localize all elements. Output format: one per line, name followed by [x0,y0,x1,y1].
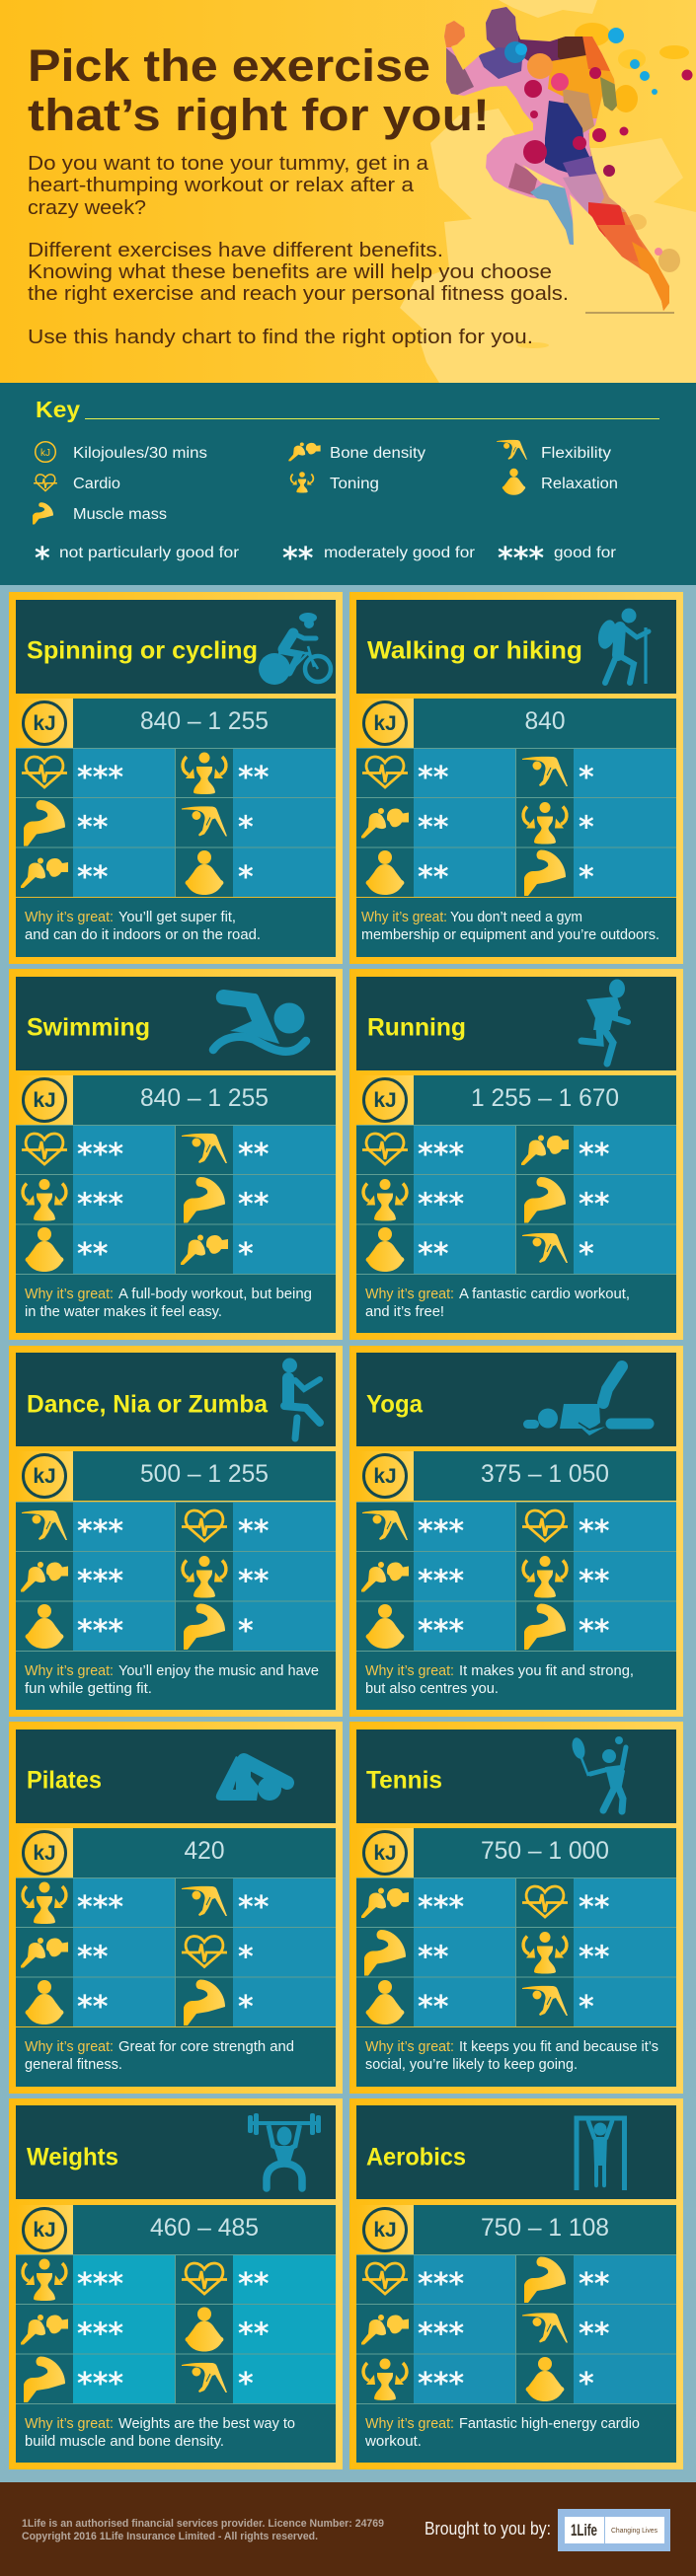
rating: cardio: ** [238,2267,270,2302]
kilojoule range: kJ [33,1465,56,1488]
rating: toning [183,752,270,795]
rating: bone density [361,2315,464,2352]
rating: flexibility [522,1986,594,2024]
icon: runner [581,979,628,1064]
rating: toning [23,1179,123,1222]
kilojoule range: kJ [373,1465,397,1488]
why it's great [16,897,336,957]
rating: bone density: ** [418,811,449,846]
panel: Spinning or cycling [9,592,343,964]
rating: relaxation: *** [418,1614,464,1649]
panel: Yoga [349,1346,683,1717]
icon: yoga pose [523,1366,649,1435]
kilojoule range: 840 – 1 255 [140,1084,269,1112]
panel: Pilates [9,1722,343,2094]
rating: cardio: *** [418,1138,464,1172]
heading: Weights [27,2143,118,2171]
logo: 1Life [558,2509,670,2551]
heading: Running [367,1014,466,1042]
why it's great: Great for core strength and [118,2039,294,2055]
rating: toning [363,1179,464,1222]
kilojoule range [16,1828,336,1877]
logo: 1Life: Changing Lives [611,2526,657,2535]
kilojoule range: 840 – 1 255 [140,707,269,735]
kilojoule range [356,2205,676,2254]
rating: bone density: *** [418,1890,464,1925]
rating: muscle mass: ** [579,1188,610,1222]
heading: Yoga [366,1391,424,1419]
rating: flexibility [182,2363,254,2401]
kilojoule range: kJ [33,2219,56,2242]
legend: two stars: ** [282,542,314,576]
why it's great: membership or equipment and you’re outdoors. [361,927,659,943]
key item: bone density: Bone density [330,445,425,462]
rating: toning [523,1932,610,1975]
icon: dancer [282,1358,320,1438]
rating: bone density [21,1938,109,1975]
rating: relaxation: ** [418,1237,449,1272]
rating: relaxation [366,1604,464,1649]
rating: flexibility: * [579,761,594,795]
title: that’s right for you! [28,90,490,140]
rating: muscle mass: ** [579,1614,610,1649]
rating: muscle mass [184,1177,270,1223]
key item: cardio: Cardio [73,476,120,492]
panel: Tennis [349,1722,683,2094]
rating: toning [523,1556,610,1599]
rating: toning: *** [418,2367,464,2401]
why it's great: build muscle and bone density. [25,2434,224,2450]
rating: relaxation: ** [238,2318,270,2352]
why it's great: fun while getting fit. [25,1681,152,1697]
why it's great: It keeps you fit and because it’s [459,2039,658,2055]
why it's great: general fitness. [25,2057,122,2073]
rating: relaxation [26,1980,109,2024]
key item: flexibility: Flexibility [541,445,611,462]
rating: muscle mass: * [238,1990,254,2024]
brought to you by: Brought to you by: [425,2519,551,2539]
rating: toning [23,2259,123,2302]
icon: cyclist [259,613,331,685]
kilojoule range [16,1451,336,1501]
kilojoule range [16,699,336,748]
kilojoule range: 375 – 1 050 [481,1460,609,1488]
why it's great [16,2026,336,2087]
icon: weightlifter [248,2113,321,2188]
rating: relaxation: ** [418,1990,449,2024]
intro text: the right exercise and reach your personal fitness goals. [28,283,569,305]
kilojoule range: kJ [373,712,397,735]
heading: Walking or hiking [367,637,582,665]
why it's great: Why it’s great: [365,1663,454,1679]
rating: bone density [21,858,109,895]
why it's great: in the water makes it feel easy. [25,1304,222,1320]
why it's great [16,2403,336,2463]
benefit ratings [356,748,676,897]
key item: flexibility [497,440,611,462]
rating: bone density [361,808,449,846]
rating: muscle mass [184,1604,254,1650]
rating: toning: *** [77,2267,123,2302]
rating: flexibility: * [238,811,254,846]
rating: relaxation: ** [77,1990,109,2024]
kilojoule range: kJ [373,1089,397,1112]
rating: cardio [22,1134,123,1172]
rating: toning: *** [77,1890,123,1925]
key item: relaxation: Relaxation [541,476,618,492]
key item: relaxation [503,469,618,495]
rating: bone density: *** [418,2318,464,2352]
rating: cardio [22,757,123,795]
why it's great: social, you’re likely to keep going. [365,2057,578,2073]
why it's great [16,1274,336,1333]
rating: muscle mass [364,1930,449,1975]
why it's great: Fantastic high-energy cardio [459,2416,640,2432]
rating: muscle mass: ** [238,1188,270,1222]
why it's great: A full-body workout, but being [118,1287,312,1302]
illustration: colourful runner [434,0,693,326]
heading: Tennis [366,1766,442,1794]
rating: toning: *** [77,1188,123,1222]
why it's great: Why it’s great: [365,2039,454,2055]
legend: two stars: moderately good for [324,545,475,561]
kilojoule range [356,1075,676,1125]
rating: flexibility [522,757,594,795]
panel: Running [349,969,683,1340]
rating: toning: ** [238,761,270,795]
key item: kilojoules: kJ [40,448,50,459]
rating: cardio: *** [418,2267,464,2302]
rating: flexibility [182,1134,270,1172]
rating: relaxation [186,2307,270,2352]
rating: flexibility: * [579,1990,594,2024]
intro text: Different exercises have different benefits. [28,240,443,261]
why it's great: and it’s free! [365,1304,444,1320]
icon: figure on bar [577,2118,624,2190]
why it's great [356,2403,676,2463]
rating: cardio: ** [579,1890,610,1925]
intro text: Do you want to tone your tummy, get in a [28,153,429,175]
legend: one star: not particularly good for [59,545,239,561]
rating: muscle mass [24,2356,123,2402]
rating: relaxation [366,850,449,895]
kilojoule range: 750 – 1 108 [481,2214,609,2242]
rating: cardio: ** [418,761,449,795]
rating: flexibility: ** [238,1138,270,1172]
rating: flexibility: *** [418,1514,464,1549]
why it's great: workout. [364,2434,422,2450]
kilojoule range [356,1828,676,1877]
panel: Aerobics [349,2098,683,2469]
why it's great [356,2026,676,2087]
kilojoule range: 420 [184,1837,225,1865]
title: Pick the exercise [28,40,430,91]
rating: relaxation [26,1227,109,1272]
kilojoule range: kJ [373,2219,397,2242]
rating: toning: *** [418,1188,464,1222]
rating: flexibility: ** [238,1890,270,1925]
rating: muscle mass [184,1979,254,2025]
rating: bone density [21,2315,123,2352]
legal text: Copyright 2016 1Life Insurance Limited - All rights reserved. [22,2531,318,2542]
rating: flexibility: ** [579,2318,610,2352]
benefit ratings [16,1125,336,1274]
rating: cardio: *** [77,761,123,795]
rating: cardio [182,1936,254,1975]
legend: three stars: good for [554,545,616,561]
why it's great: A fantastic cardio workout, [459,1287,630,1302]
key item: muscle mass [33,502,167,525]
key item: kilojoules: Kilojoules/30 mins [73,445,207,462]
legend: one star: * [35,542,50,576]
why it's great: Why it’s great: [25,1663,114,1679]
panel: key [0,383,696,585]
kilojoule range: 1 255 – 1 670 [471,1084,619,1112]
kilojoule range [356,1451,676,1501]
legal text [22,2518,384,2542]
rating: cardio: ** [579,1514,610,1549]
why it's great: Why it’s great: [361,910,447,925]
kilojoule range: 460 – 485 [150,2214,259,2242]
heading: Swimming [27,1014,150,1042]
rating: toning [523,802,594,846]
rating: toning [363,2358,464,2401]
rating: flexibility [522,1233,594,1272]
key item: cardio [34,475,120,492]
rating: muscle mass: * [238,1614,254,1649]
rating: relaxation [26,1604,123,1649]
kilojoule range [356,699,676,748]
kilojoule range [16,1075,336,1125]
rating: bone density: ** [77,860,109,895]
logo: 1Life: 1Life [571,2521,597,2539]
legend: one star [35,542,239,576]
key item: muscle mass: Muscle mass [73,506,167,523]
rating: flexibility [362,1510,464,1549]
rating: bone density: ** [579,1138,610,1172]
benefit ratings [356,1502,676,1651]
kilojoule range: 840 [525,707,565,735]
intro text: Use this handy chart to find the right option for you. [28,327,533,348]
rating: relaxation: * [238,860,254,895]
why it's great: It makes you fit and strong, [459,1663,634,1679]
rating: cardio [182,1510,270,1549]
benefit ratings [16,2254,336,2403]
rating: toning [23,1882,123,1925]
kilojoule range: 750 – 1 000 [481,1837,609,1865]
rating: flexibility [22,1510,123,1549]
panel: Walking or hiking [349,592,683,964]
rating: muscle mass: ** [579,2267,610,2302]
benefit ratings [16,1877,336,2026]
legend: two stars [282,542,475,576]
legend: three stars: *** [498,542,544,576]
why it's great: Why it’s great: [25,1287,114,1302]
benefit ratings [356,1877,676,2026]
rating: bone density [361,1888,464,1925]
rating: relaxation: *** [77,1614,123,1649]
heading: Dance, Nia or Zumba [27,1391,269,1419]
rating: muscle mass [524,850,594,896]
rating: muscle mass: ** [77,811,109,846]
heading: Aerobics [366,2143,466,2171]
rating: toning: * [579,811,594,846]
rating: toning: ** [579,1565,610,1599]
benefit ratings [16,1502,336,1651]
why it's great: Why it’s great: [25,910,114,925]
key item: bone density [288,443,425,462]
why it's great: but also centres you. [365,1681,499,1697]
rating: bone density: ** [77,1941,109,1975]
panel: Weights [9,2098,343,2469]
rating: muscle mass [24,800,109,846]
benefit ratings [356,1125,676,1274]
rating: cardio [362,757,449,795]
rating: muscle mass: ** [418,1941,449,1975]
key item: kilojoules [36,442,207,462]
why it's great: You don’t need a gym [450,910,582,925]
rating: toning: ** [238,1565,270,1599]
rating: cardio [522,1886,610,1925]
rating: bone density: *** [77,1565,123,1599]
key item: toning [291,472,379,493]
panel: Dance, Nia or Zumba [9,1346,343,1717]
why it's great [356,1274,676,1333]
kilojoule range [16,2205,336,2254]
panel: intro header [0,0,696,383]
why it's great: You’ll get super fit, [118,910,236,925]
rating: cardio: * [238,1941,254,1975]
kilojoule range: kJ [373,1842,397,1865]
why it's great [16,1651,336,1710]
rating: muscle mass [524,1604,610,1650]
rating: cardio: *** [77,1138,123,1172]
intro text: crazy week? [28,197,146,219]
rating: relaxation: ** [418,860,449,895]
rating: relaxation: * [579,2367,594,2401]
rating: relaxation [526,2357,594,2401]
why it's great: You’ll enjoy the music and have [118,1663,319,1679]
why it's great: Why it’s great: [365,2416,454,2432]
rating: relaxation [366,1227,449,1272]
rating: flexibility: * [579,1237,594,1272]
heading: Pilates [27,1766,102,1794]
rating: relaxation: ** [77,1237,109,1272]
intro text: Knowing what these benefits are will help you choose [28,261,552,283]
rating: bone density [361,1562,464,1599]
why it's great: Why it’s great: [25,2416,114,2432]
rating: cardio [182,2263,270,2302]
intro text: heart-thumping workout or relax after a [28,175,415,196]
heading: Spinning or cycling [27,637,258,665]
why it's great: Why it’s great: [365,1287,454,1302]
rating: relaxation [186,850,254,895]
kilojoule range: kJ [33,1842,56,1865]
rating: relaxation [366,1980,449,2024]
rating: muscle mass: *** [77,2367,123,2401]
rating: muscle mass [524,2257,610,2303]
rating: bone density [21,1562,123,1599]
rating: muscle mass: * [579,860,594,895]
kilojoule range: kJ [33,1089,56,1112]
why it's great: and can do it indoors or on the road. [25,927,261,943]
panel: Swimming [9,969,343,1340]
benefit ratings [356,2254,676,2403]
rating: toning [183,1556,270,1599]
legal text: 1Life is an authorised financial services provider. Licence Number: 24769 [22,2518,384,2530]
why it's great [356,897,676,957]
rating: bone density: * [238,1237,254,1272]
rating: bone density: *** [77,2318,123,2352]
intro text [28,153,569,348]
rating: flexibility [522,2313,610,2352]
rating: bone density: *** [418,1565,464,1599]
rating: muscle mass [524,1177,610,1223]
why it's great [356,1651,676,1710]
key heading: Key [36,397,80,422]
rating: flexibility: *** [77,1514,123,1549]
rating: cardio [522,1510,610,1549]
icon: tennis player [570,1736,626,1811]
key item: toning: Toning [330,476,379,492]
icon: pilates pose [216,1756,287,1801]
rating: flexibility [182,1886,270,1925]
rating: toning: ** [579,1941,610,1975]
rating: cardio [362,1134,464,1172]
rating: cardio [362,2263,464,2302]
rating: bone density [181,1235,254,1272]
benefit ratings [16,748,336,897]
why it's great: Why it’s great: [25,2039,114,2055]
rating: flexibility: * [238,2367,254,2401]
panel: footer [0,2482,696,2576]
rating: bone density [521,1135,610,1172]
icon: hiker [595,608,649,684]
legend: three stars [498,542,616,576]
kilojoule range: kJ [33,712,56,735]
rating: flexibility [182,806,254,846]
rating: cardio: ** [238,1514,270,1549]
kilojoule range: 500 – 1 255 [140,1460,269,1488]
title [28,40,490,140]
icon: swimmer [213,990,306,1052]
why it's great: Weights are the best way to [118,2416,295,2432]
